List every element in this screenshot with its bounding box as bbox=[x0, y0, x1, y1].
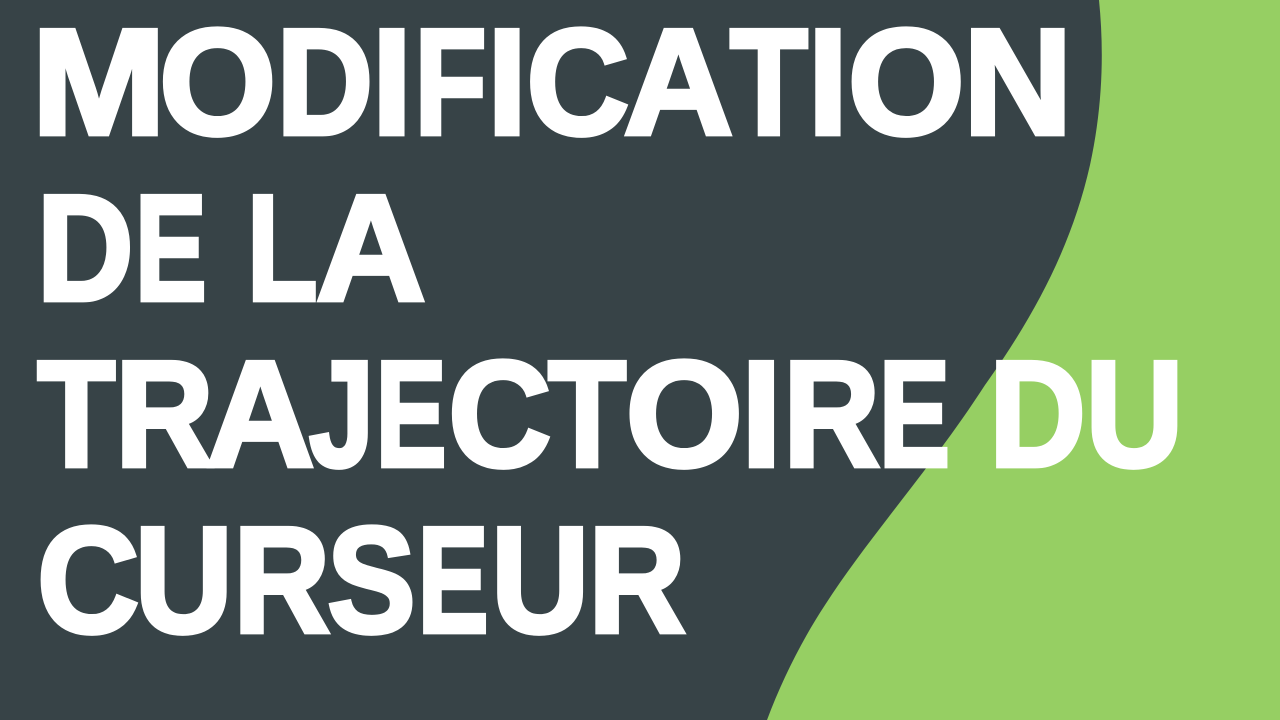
title line 4: C bbox=[37, 495, 139, 664]
title line 3: D bbox=[989, 329, 1086, 498]
title line 3 bbox=[36, 329, 1184, 498]
title line 3: T bbox=[37, 329, 115, 498]
title line 1: A bbox=[624, 0, 733, 166]
title line 1: M bbox=[32, 0, 166, 166]
title line 2: L bbox=[247, 163, 318, 332]
title line 4 bbox=[37, 495, 687, 664]
title line 2: A bbox=[316, 163, 426, 332]
title line 1: D bbox=[277, 0, 373, 166]
title line 4: U bbox=[135, 495, 233, 664]
title line 1: I bbox=[372, 0, 412, 166]
title line 1: F bbox=[415, 0, 487, 166]
title line 4: E bbox=[418, 495, 489, 664]
title line 3: R bbox=[783, 329, 880, 498]
title line 1: C bbox=[526, 0, 629, 166]
title line 2 bbox=[37, 163, 426, 332]
title line 2: D bbox=[37, 163, 134, 332]
title line 4: R bbox=[233, 495, 330, 664]
title line 1: I bbox=[487, 0, 527, 166]
title line 3: E bbox=[879, 329, 950, 498]
title line 3: C bbox=[448, 329, 551, 498]
title line 3: R bbox=[115, 329, 214, 498]
title line 1: I bbox=[808, 0, 848, 166]
title line 3: I bbox=[741, 329, 781, 498]
title line 1 bbox=[32, 0, 1072, 166]
title line 3: A bbox=[206, 329, 315, 498]
title line 4: U bbox=[491, 495, 589, 664]
title line 4: R bbox=[588, 495, 686, 664]
title line 1: O bbox=[848, 0, 965, 166]
title line 4: S bbox=[327, 495, 416, 664]
title line 1: T bbox=[730, 0, 808, 166]
title line 3: J bbox=[309, 329, 374, 498]
title line 3: O bbox=[626, 329, 743, 498]
title line 3: E bbox=[376, 329, 447, 498]
title line 3: U bbox=[1086, 329, 1184, 498]
title line 3: T bbox=[548, 329, 626, 498]
title line 2: E bbox=[135, 163, 207, 332]
title line 1: O bbox=[159, 0, 276, 166]
title line 1: N bbox=[963, 0, 1072, 166]
